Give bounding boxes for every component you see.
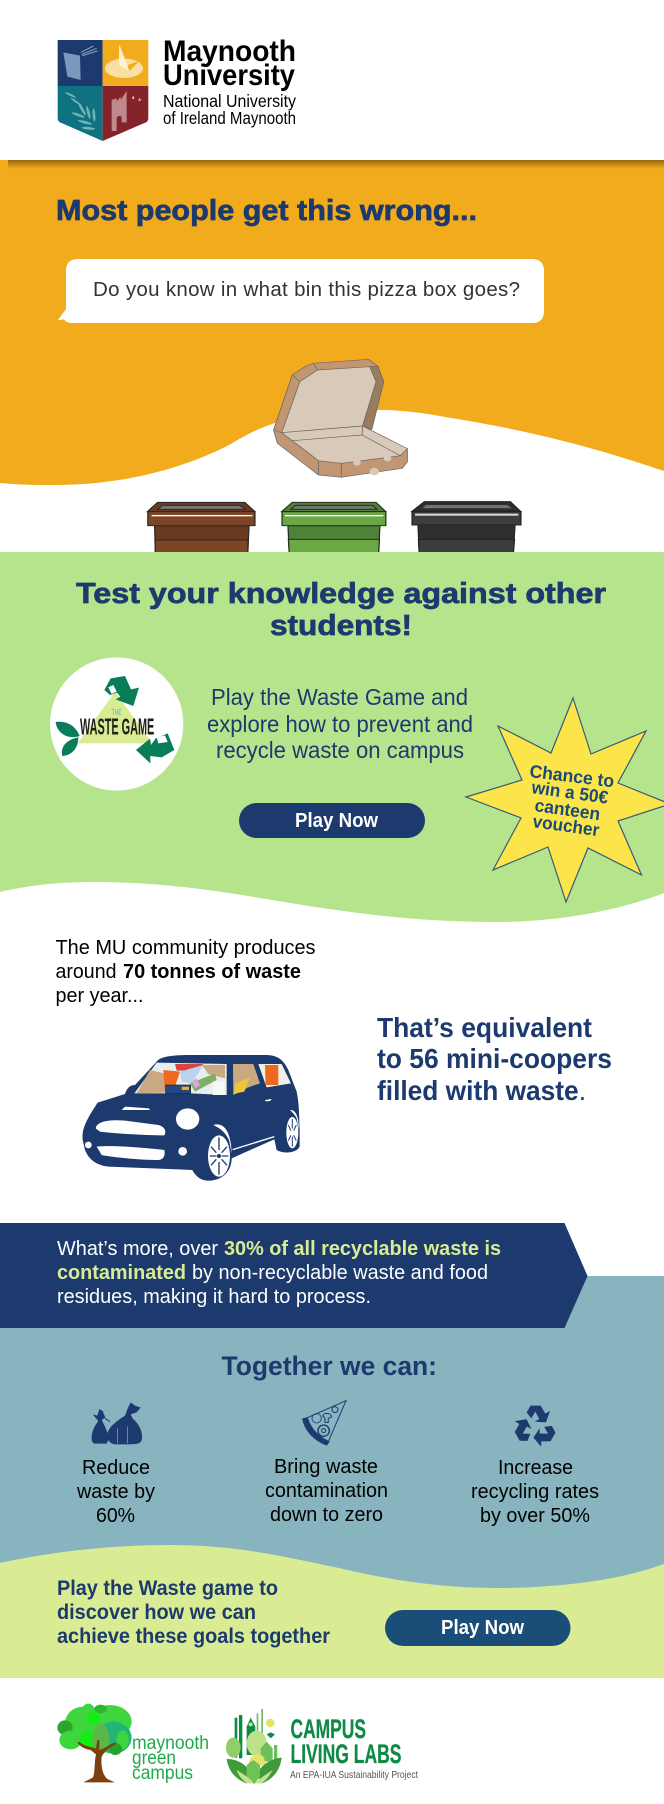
heading: test your knowledge [76, 578, 606, 642]
panel: header logo [58, 35, 296, 141]
button: play now: Play Now [441, 1617, 524, 1639]
text: play the waste game goals: discover how we can [57, 1601, 256, 1624]
text: bring waste contamination: Bring waste [274, 1456, 378, 1478]
icon: rubbish bags [92, 1402, 142, 1444]
icon: maynooth green campus tree [57, 1704, 132, 1782]
text: campus living labs: An EPA-IUA Sustainability Project [290, 1769, 418, 1781]
panel: contamination arrow banner: What’s more, over [57, 1238, 218, 1260]
text: Maynooth University wordmark: of Ireland Maynooth [163, 108, 296, 128]
text: campus living labs [290, 1714, 418, 1781]
text: mini-coopers equivalent: filled with waste. [377, 1075, 586, 1106]
heading: test your knowledge: students! [270, 610, 412, 642]
icon: campus living labs city in hands [226, 1709, 282, 1784]
text: mini-coopers equivalent: That’s equivalent [377, 1012, 592, 1043]
text: campus living labs: LIVING LABS [290, 1739, 402, 1769]
text: bring waste contamination [265, 1456, 388, 1526]
text: play the waste game goals: achieve these goals together [57, 1625, 330, 1648]
panel: orange quiz section [0, 160, 664, 553]
text: bring waste contamination: contamination [265, 1480, 388, 1502]
panel: green waste game section [0, 552, 664, 922]
callout: voucher star [466, 698, 664, 902]
button: play now: Play Now [295, 810, 378, 832]
icon: waste game logo: THE [112, 707, 122, 717]
text: increase recycling rates [471, 1457, 599, 1527]
text: reduce waste [76, 1457, 155, 1527]
heading: most people: Most people get this wrong... [56, 195, 477, 227]
text: Maynooth University wordmark [163, 35, 296, 128]
icon: black bin [412, 502, 521, 553]
text: maynooth green campus: campus [132, 1762, 193, 1784]
callout: voucher star: win a 50€ [529, 777, 609, 808]
icon: waste game logo [50, 657, 183, 791]
text: play the waste game goals [57, 1577, 330, 1648]
heading: test your knowledge: Test your knowledge against other [76, 578, 606, 610]
text: reduce waste: waste by [76, 1481, 155, 1503]
icon: mini cooper full of waste [82, 1055, 300, 1181]
text: Maynooth University wordmark: University [163, 59, 295, 92]
text: play the waste game goals: Play the Waste game to [57, 1577, 278, 1600]
text: maynooth green campus: green [132, 1747, 176, 1769]
text: reduce waste: 60% [96, 1505, 135, 1527]
text: maynooth green campus: maynooth [132, 1732, 209, 1754]
panel: contamination arrow banner: contaminated [57, 1262, 186, 1284]
callout: voucher star: canteen [533, 795, 602, 824]
button: play now [239, 803, 425, 838]
text: tonnes of waste: 70 tonnes of waste [123, 961, 301, 983]
text: mini-coopers equivalent [377, 1012, 612, 1106]
panel: contamination arrow banner: residues, making it hard to process. [57, 1286, 371, 1308]
heading: together we can: Together we can: [222, 1351, 437, 1381]
text: play the waste game: Play the Waste Game and [211, 684, 468, 710]
callout: speech bubble: Do you know in what bin this pizza box goes? [93, 278, 520, 301]
text: increase recycling rates: Increase [498, 1457, 573, 1479]
text: tonnes of waste: per year... [56, 985, 144, 1007]
panel: contamination arrow banner [0, 1223, 588, 1328]
text: play the waste game: explore how to prevent and [207, 711, 473, 737]
text: tonnes of waste [56, 937, 316, 1007]
icon: brown bin [147, 502, 255, 553]
text: mini-coopers equivalent: to 56 mini-coopers [377, 1043, 612, 1074]
panel: contamination arrow banner: 30% of all recyclable waste is [224, 1238, 501, 1260]
text: reduce waste: Reduce [82, 1457, 150, 1479]
text: tonnes of waste: The MU community produces [56, 937, 316, 959]
panel: teal goals section [0, 1276, 664, 1596]
button: play now [385, 1610, 570, 1646]
icon: pizza slice [303, 1401, 346, 1445]
text: increase recycling rates: by over 50% [480, 1505, 590, 1527]
callout: voucher star: voucher [531, 811, 601, 840]
icon: green bin [282, 502, 386, 553]
panel: light green call to action [0, 1545, 664, 1678]
icon: university shield [58, 40, 148, 141]
text: Maynooth University wordmark: National University [163, 91, 296, 111]
text: play the waste game [207, 684, 473, 763]
callout: speech bubble [58, 259, 544, 323]
text: Maynooth University wordmark: Maynooth [163, 35, 296, 68]
panel: contamination arrow banner: by non-recyclable waste and food [192, 1262, 488, 1284]
text: increase recycling rates: recycling rates [471, 1481, 599, 1503]
text: play the waste game: recycle waste on campus [216, 737, 464, 763]
icon: recycling arrows [510, 1406, 558, 1449]
callout: voucher star: Chance to [529, 761, 615, 791]
text: maynooth green campus [132, 1732, 209, 1784]
text: campus living labs: CAMPUS [290, 1714, 366, 1744]
icon: pizza box [274, 359, 407, 477]
text: bring waste contamination: down to zero [270, 1504, 383, 1526]
text: tonnes of waste: around [56, 961, 116, 983]
icon: waste game logo: WASTE GAME [80, 714, 154, 740]
